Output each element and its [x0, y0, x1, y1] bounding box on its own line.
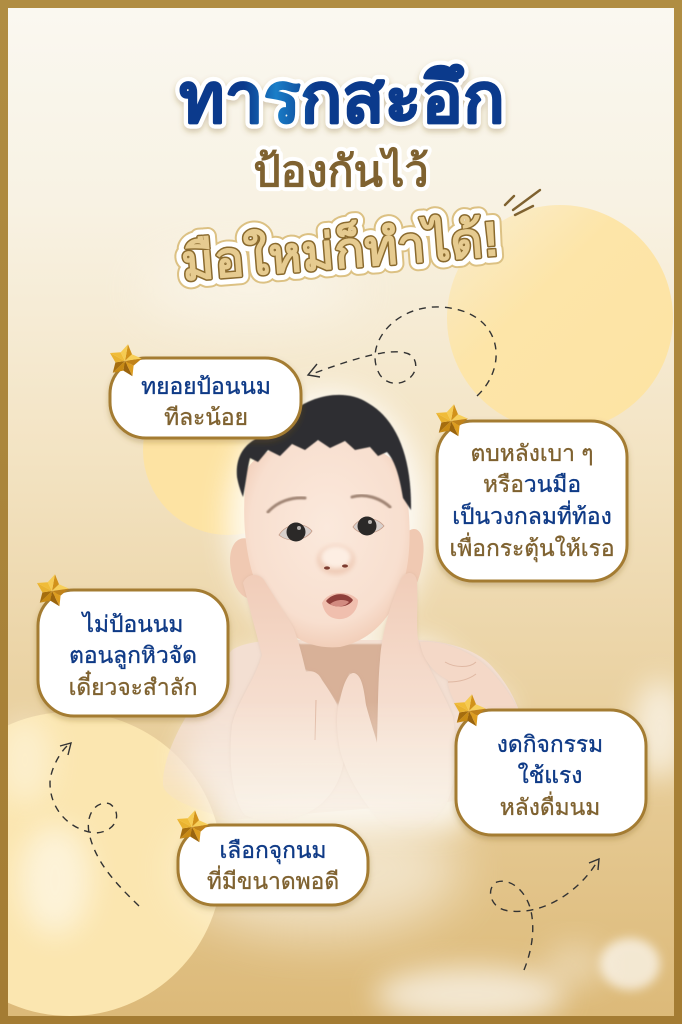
callout: avoid activity: งดกิจกรรม: [497, 731, 603, 757]
callout: pat the back: ตบหลังเบา ๆ: [470, 440, 594, 466]
mouth: [322, 593, 358, 619]
knuckle lines: [315, 662, 476, 740]
eyebrows: [268, 498, 305, 512]
star icon 1: [110, 344, 142, 376]
subtitle: ป้องกันไว้: [253, 146, 429, 196]
callout: choose nipple: เลือกจุกนม: [219, 837, 327, 864]
callout: pat the back: เป็นวงกลมที่ท้อง: [452, 500, 612, 529]
callout: feed little by little: [110, 358, 301, 438]
head: [244, 440, 410, 647]
star icon 2: [436, 404, 468, 436]
right eye: [353, 516, 384, 536]
callout: do not feed when too hungry: ไม่ป้อนนม: [81, 611, 183, 637]
baby hand: [420, 642, 517, 712]
callout: avoid activity: ใช้แรง: [518, 762, 582, 788]
ear right: [406, 529, 424, 582]
accent lines: [505, 190, 540, 215]
title heading: ทารกสะอึก: [179, 60, 505, 137]
star icon 5: [177, 810, 209, 842]
background clouds: [0, 255, 682, 1023]
nose: [317, 545, 355, 575]
callout: pat the back: หรือวนมือ: [483, 471, 581, 497]
badge heading: มือใหม่ก็ทำได้!: [179, 208, 501, 291]
baby torso and shoulders: [163, 640, 518, 800]
left eye: [279, 522, 312, 542]
callout: pat the back: [437, 421, 627, 581]
callout: feed little by little: ทีละน้อย: [164, 404, 248, 430]
callout: avoid activity: หลังดื่มนม: [500, 791, 600, 820]
callout: choose nipple: ที่มีขนาดพอดี: [207, 865, 339, 894]
decorative background circles: [0, 205, 673, 1016]
glow around baby: [178, 390, 510, 830]
star icon 3: [37, 574, 69, 606]
right hand: [336, 574, 454, 746]
callout: do not feed when too hungry: [38, 590, 228, 716]
ear left: [230, 538, 253, 598]
callout: do not feed when too hungry: เดี๋ยวจะสำลัก: [69, 670, 197, 700]
baby photo illustration: [163, 390, 518, 831]
callout: choose nipple: [178, 825, 368, 905]
callout: avoid activity: [456, 710, 646, 835]
badge heading: มือใหม่ก็ทำได้!: [179, 208, 501, 291]
star icon 4: [454, 694, 486, 726]
dashed arrow: bottom right: [491, 859, 599, 970]
dashed arrow: left: [50, 743, 139, 906]
title heading: ทารกสะอึก: [179, 60, 505, 137]
badge heading: มือใหม่ก็ทำได้!: [179, 208, 501, 291]
hair: [237, 395, 411, 510]
dashed arrow: top: [308, 307, 496, 396]
callout: pat the back: เพื่อกระตุ้นให้เรอ: [449, 532, 615, 562]
callout: do not feed when too hungry: ตอนลูกหิวจัด: [69, 642, 197, 669]
callout: feed little by little: ทยอยป้อนนม: [141, 373, 271, 399]
left hand: [232, 574, 336, 723]
